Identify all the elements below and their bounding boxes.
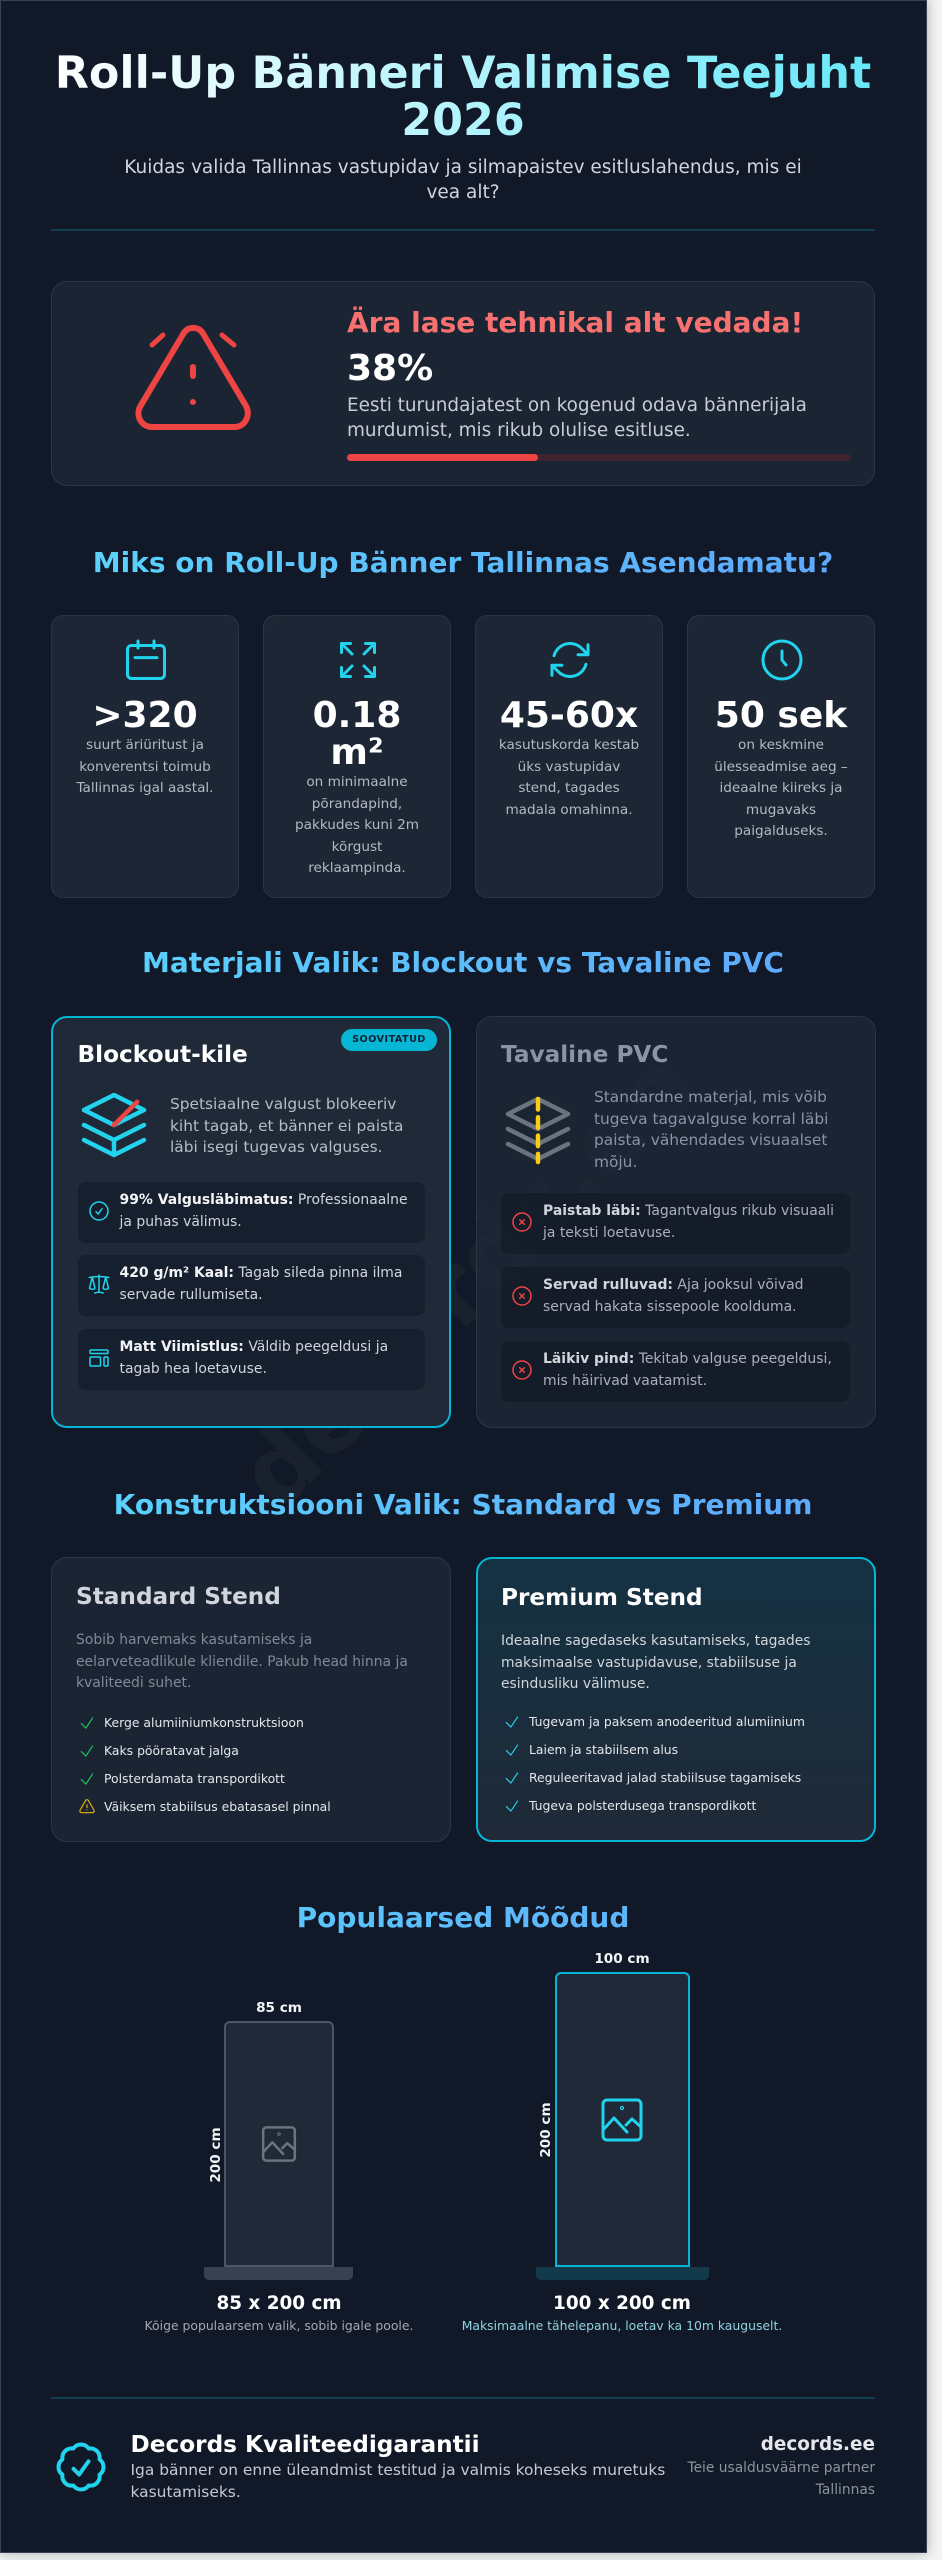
- brand block: [675, 2420, 875, 2510]
- feature text: tagab hea loetavuse.: [120, 1361, 267, 1377]
- heading: sizes: [51, 1900, 875, 1940]
- icon: scale: [88, 1274, 110, 1294]
- stat text: mugavaks: [746, 802, 816, 818]
- stat text: madala omahinna.: [505, 802, 633, 818]
- stat value: m²: [330, 732, 384, 773]
- feature text: [120, 1339, 388, 1377]
- panel: blockout: [51, 1016, 451, 1428]
- heading: material: [51, 945, 875, 985]
- standard description: [76, 1632, 408, 1691]
- brand tagline: [687, 2458, 875, 2501]
- guarantee text: Iga bänner on enne üleandmist testitud ja valmis koheseks muretuks: [130, 2461, 665, 2479]
- drawback: see-through: [501, 1193, 850, 1254]
- guarantee text: [130, 2459, 665, 2503]
- alert description: murdumist, mis rikub olulise esitluse.: [347, 420, 691, 441]
- stat text: stend, tagades: [518, 780, 620, 796]
- standard description: eelarveteadlikule kliendile. Pakub head hinna ja: [76, 1654, 408, 1670]
- height label: 200 cm: [208, 2127, 224, 2183]
- list item: Tugevam ja paksem anodeeritud alumiinium: [529, 1714, 805, 1729]
- stat text: kõrgust: [332, 839, 382, 855]
- stat value: 50 sek: [715, 695, 847, 736]
- stat text: on keskmine: [738, 737, 824, 753]
- footer divider: [51, 2397, 875, 2399]
- icon: image: [259, 2124, 299, 2164]
- width label: 85 cm: [256, 2000, 302, 2016]
- drawback text: servad hakata sissepoole koolduma.: [543, 1299, 797, 1315]
- brand name: decords.ee: [761, 2434, 875, 2455]
- width label: 100 cm: [594, 1951, 650, 1967]
- subtitle: [124, 157, 802, 202]
- stat card 3: [475, 615, 663, 898]
- stat text: [295, 774, 419, 876]
- panel: regular PVC: [476, 1016, 876, 1428]
- stat text: ülesseadmise aeg –: [714, 759, 848, 775]
- icon: layers with block: [82, 1092, 146, 1158]
- title: [51, 50, 875, 154]
- size title: 85 x 200 cm: [216, 2293, 342, 2314]
- feature text: [120, 1265, 402, 1303]
- guarantee title: Decords Kvaliteedigarantii: [130, 2431, 480, 2458]
- banner base: [536, 2267, 709, 2280]
- list item: Kerge alumiiniumkonstruktsioon: [104, 1715, 304, 1730]
- brand tagline: Tallinnas: [816, 2482, 875, 2498]
- stat value: 45-60x: [500, 695, 638, 736]
- stat text: konverentsi toimub: [79, 759, 211, 775]
- drawback text: [542, 1203, 834, 1241]
- stat card 2: [263, 615, 451, 898]
- feature text: Matt Viimistlus: Väldib peegeldusi ja: [120, 1339, 388, 1355]
- list item: Polsterdamata transpordikott: [104, 1771, 285, 1786]
- size caption: Maksimaalne tähelepanu, loetav ka 10m kauguselt.: [462, 2318, 782, 2333]
- banner panel: [555, 1972, 690, 2267]
- stat text: reklaampinda.: [308, 860, 406, 876]
- alert description: [347, 395, 807, 441]
- feature: matte finish: [78, 1329, 425, 1390]
- stat card 1: [51, 615, 239, 898]
- height label: 200 cm: [538, 2102, 554, 2158]
- premium description: esindusliku välimuse.: [501, 1676, 650, 1692]
- drawback text: ja teksti loetavuse.: [543, 1225, 675, 1241]
- icon: refresh: [550, 642, 590, 678]
- PVC description: paista, vähendades visuaalset: [594, 1131, 827, 1149]
- blockout description: [170, 1095, 403, 1156]
- stat text: paigalduseks.: [734, 823, 828, 839]
- icon: check circle: [89, 1201, 109, 1221]
- heading: material: Materjali Valik: Blockout vs Tavaline PVC: [142, 946, 784, 979]
- icon: expand: [340, 642, 376, 678]
- stat text: ideaalne kiireks ja: [720, 780, 842, 796]
- feature text: ja puhas välimus.: [120, 1214, 242, 1230]
- drawback text: Paistab läbi: Tagantvalgus rikub visuaali: [543, 1203, 834, 1219]
- feature: opacity: [78, 1182, 425, 1243]
- stat text: on minimaalne: [306, 774, 408, 790]
- guarantee text: kasutamiseks.: [130, 2483, 241, 2501]
- drawback: curling: [501, 1267, 850, 1328]
- stat text: pakkudes kuni 2m: [295, 817, 419, 833]
- stat text: [76, 737, 214, 796]
- watermark: decords.ee: [216, 1029, 718, 1531]
- drawback text: [543, 1277, 804, 1315]
- panel: alert: [51, 281, 875, 486]
- feature text: 420 g/m² Kaal: Tagab sileda pinna ilma: [120, 1265, 402, 1281]
- icon: quality badge: [51, 2437, 111, 2497]
- standard title: Standard Stend: [76, 1583, 281, 1610]
- drawback text: mis häirivad vaatamist.: [543, 1373, 707, 1389]
- list item: Kaks pööratavat jalga: [104, 1743, 239, 1758]
- panel: standard stand: [51, 1557, 451, 1842]
- list item: Laiem ja stabiilsem alus: [529, 1742, 678, 1757]
- premium title: Premium Stend: [501, 1584, 703, 1611]
- stat card 4: [687, 615, 875, 898]
- PVC description: Standardne materjal, mis võib: [594, 1088, 827, 1106]
- icon: calendar: [126, 640, 166, 680]
- PVC description: mõju.: [594, 1153, 637, 1171]
- blockout description: Spetsiaalne valgust blokeeriv: [170, 1095, 396, 1113]
- list item: Väiksem stabiilsus ebatasasel pinnal: [104, 1799, 331, 1814]
- brand tagline: Teie usaldusväärne partner: [687, 2460, 875, 2476]
- icon: image: [598, 2096, 646, 2144]
- icon: x circle: [512, 1212, 532, 1232]
- blockout description: läbi isegi tugevas valguses.: [170, 1138, 383, 1156]
- stat value: [313, 695, 401, 773]
- stat text: [499, 737, 639, 818]
- standard description: kvaliteedi suhet.: [76, 1675, 191, 1691]
- alert statistic: 38%: [347, 348, 433, 389]
- alert heading: Ära lase tehnikal alt vedada!: [347, 306, 803, 339]
- icon: layers with leak: [506, 1096, 570, 1164]
- title: Roll-Up Bänneri Valimise Teejuht: [55, 48, 871, 99]
- title: 2026: [401, 95, 525, 146]
- banner panel: [224, 2021, 334, 2267]
- icon: layout: [89, 1349, 109, 1367]
- footer: [51, 2420, 875, 2520]
- blockout description: kiht tagab, et bänner ei paista: [170, 1117, 403, 1135]
- size title: 100 x 200 cm: [553, 2293, 691, 2314]
- stat text: suurt äriüritust ja: [86, 737, 204, 753]
- premium description: maksimaalse vastupidavuse, stabiilsuse ja: [501, 1655, 797, 1671]
- heading: why: Miks on Roll-Up Bänner Tallinnas Asendamatu?: [93, 546, 833, 579]
- list item: Reguleeritavad jalad stabiilsuse tagamiseks: [529, 1770, 801, 1785]
- panel: premium stand: [476, 1557, 876, 1842]
- PVC description: [594, 1088, 828, 1171]
- size caption: Kõige populaarsem valik, sobib igale poole.: [145, 2318, 413, 2333]
- PVC description: tugeva tagavalguse korral läbi: [594, 1110, 828, 1128]
- standard feature list: [79, 1715, 331, 1814]
- stat text: põrandapind,: [312, 796, 402, 812]
- stat value: 0.18: [313, 695, 401, 736]
- drawback: glossy: [501, 1341, 850, 1402]
- drawback text: Läikiv pind: Tekitab valguse peegeldusi,: [543, 1351, 832, 1367]
- standard description: Sobib harvemaks kasutamiseks ja: [76, 1632, 312, 1648]
- alert description: Eesti turundajatest on kogenud odava bännerijala: [347, 395, 807, 416]
- subtitle: Kuidas valida Tallinnas vastupidav ja silmapaistev esitluslahendus, mis ei: [124, 157, 802, 178]
- stat text: kasutuskorda kestab: [499, 737, 639, 753]
- heading: construction: Konstruktsiooni Valik: Standard vs Premium: [114, 1488, 812, 1521]
- stat text: Tallinnas igal aastal.: [76, 780, 214, 796]
- feature text: [119, 1192, 408, 1230]
- list item: Tugeva polsterdusega transpordikott: [529, 1798, 756, 1813]
- premium description: [501, 1633, 811, 1692]
- icon: x circle: [512, 1360, 532, 1380]
- premium description: Ideaalne sagedaseks kasutamiseks, tagades: [501, 1633, 811, 1649]
- banner base: [204, 2267, 353, 2280]
- premium feature list: [506, 1714, 805, 1813]
- PVC title: Tavaline PVC: [501, 1041, 668, 1068]
- feature text: 99% Valgusläbimatus: Professionaalne: [120, 1192, 408, 1208]
- heading: construction: [51, 1487, 875, 1527]
- heading: sizes: Populaarsed Mõõdud: [297, 1901, 629, 1934]
- stat value: >320: [92, 695, 198, 736]
- feature text: servade rullumiseta.: [120, 1287, 263, 1303]
- stat text: [714, 737, 848, 839]
- diagram: 100 x 200 stand: [452, 1946, 792, 2340]
- blockout title: Blockout-kile: [78, 1041, 248, 1068]
- badge: recommended: SOOVITATUD: [352, 1034, 426, 1045]
- subtitle: vea alt?: [426, 182, 500, 202]
- icon: x circle: [512, 1286, 532, 1306]
- stat text: üks vastupidav: [518, 759, 620, 775]
- drawback text: Servad rulluvad: Aja jooksul võivad: [543, 1277, 804, 1293]
- icon: clock: [762, 640, 802, 680]
- badge: recommended: [341, 1029, 437, 1051]
- diagram: 85 x 200 stand: [130, 1995, 428, 2340]
- header divider: [51, 229, 875, 231]
- feature: weight: [78, 1255, 425, 1316]
- drawback text: [543, 1351, 832, 1389]
- progress bar: [347, 454, 851, 461]
- icon: warning triangle: [135, 324, 251, 430]
